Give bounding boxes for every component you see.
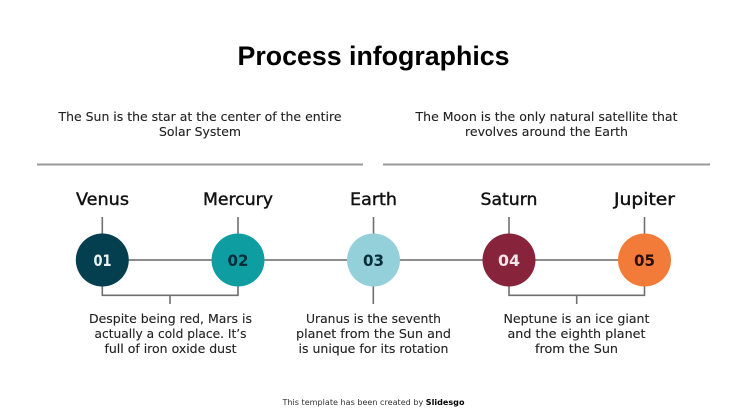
text block: Uranus description: planet from the Sun and	[296, 326, 451, 341]
step 02: Mercury	[203, 190, 273, 286]
text block: Mars description: Despite being red, Mars is	[89, 311, 252, 326]
bracket: steps 04 and 05	[509, 286, 644, 304]
title: Process infographics	[238, 41, 510, 71]
footer credit: This template has been created by Slidesgo	[281, 398, 464, 407]
text block: Moon description	[414, 109, 678, 139]
step 03: Earth: Earth	[350, 190, 397, 209]
text block: Mars description	[89, 311, 252, 356]
text block: Sun description: The Sun is the star at the center of the entire	[58, 109, 342, 124]
step 04: Saturn: 04	[498, 251, 520, 270]
divider: right header rule	[383, 164, 710, 166]
step 05: Jupiter: 05	[634, 251, 655, 270]
step 04: Saturn: Saturn	[480, 190, 538, 209]
step 01: Venus	[76, 190, 129, 286]
bracket: steps 01 and 02	[102, 286, 238, 304]
step 05: Jupiter: Jupiter	[613, 190, 675, 209]
text block: Neptune description	[504, 311, 650, 356]
timeline connector line	[102, 259, 645, 261]
step 04: Saturn	[480, 190, 538, 286]
text block: Moon description: revolves around the Earth	[465, 124, 628, 139]
text block: Sun description: Solar System	[159, 124, 241, 139]
step 02: Mercury: 02	[228, 251, 248, 270]
divider: left header rule	[37, 164, 363, 166]
text block: Uranus description: Uranus is the seventh	[306, 311, 441, 326]
connector: step 03 stem	[372, 286, 374, 304]
step 02: Mercury: Mercury	[203, 190, 273, 209]
step 01: Venus: Venus	[76, 190, 129, 209]
text block: Neptune description: Neptune is an ice giant	[504, 311, 650, 326]
connector: top stems	[102, 217, 645, 234]
step 03: Earth	[347, 190, 400, 286]
text block: Uranus description: is unique for its rotation	[298, 341, 448, 356]
text block: Sun description	[58, 109, 342, 139]
text block: Moon description: The Moon is the only natural satellite that	[414, 109, 678, 124]
text block: Mars description: actually a cold place. It’s	[94, 326, 246, 341]
step 03: Earth: 03	[363, 251, 384, 270]
step 01: Venus: 01	[94, 251, 112, 270]
step 05: Jupiter	[613, 190, 675, 286]
text block: Mars description: full of iron oxide dust	[104, 341, 237, 356]
text block: Neptune description: from the Sun	[535, 341, 618, 356]
text block: Uranus description	[296, 311, 451, 356]
text block: Neptune description: and the eighth planet	[508, 326, 646, 341]
